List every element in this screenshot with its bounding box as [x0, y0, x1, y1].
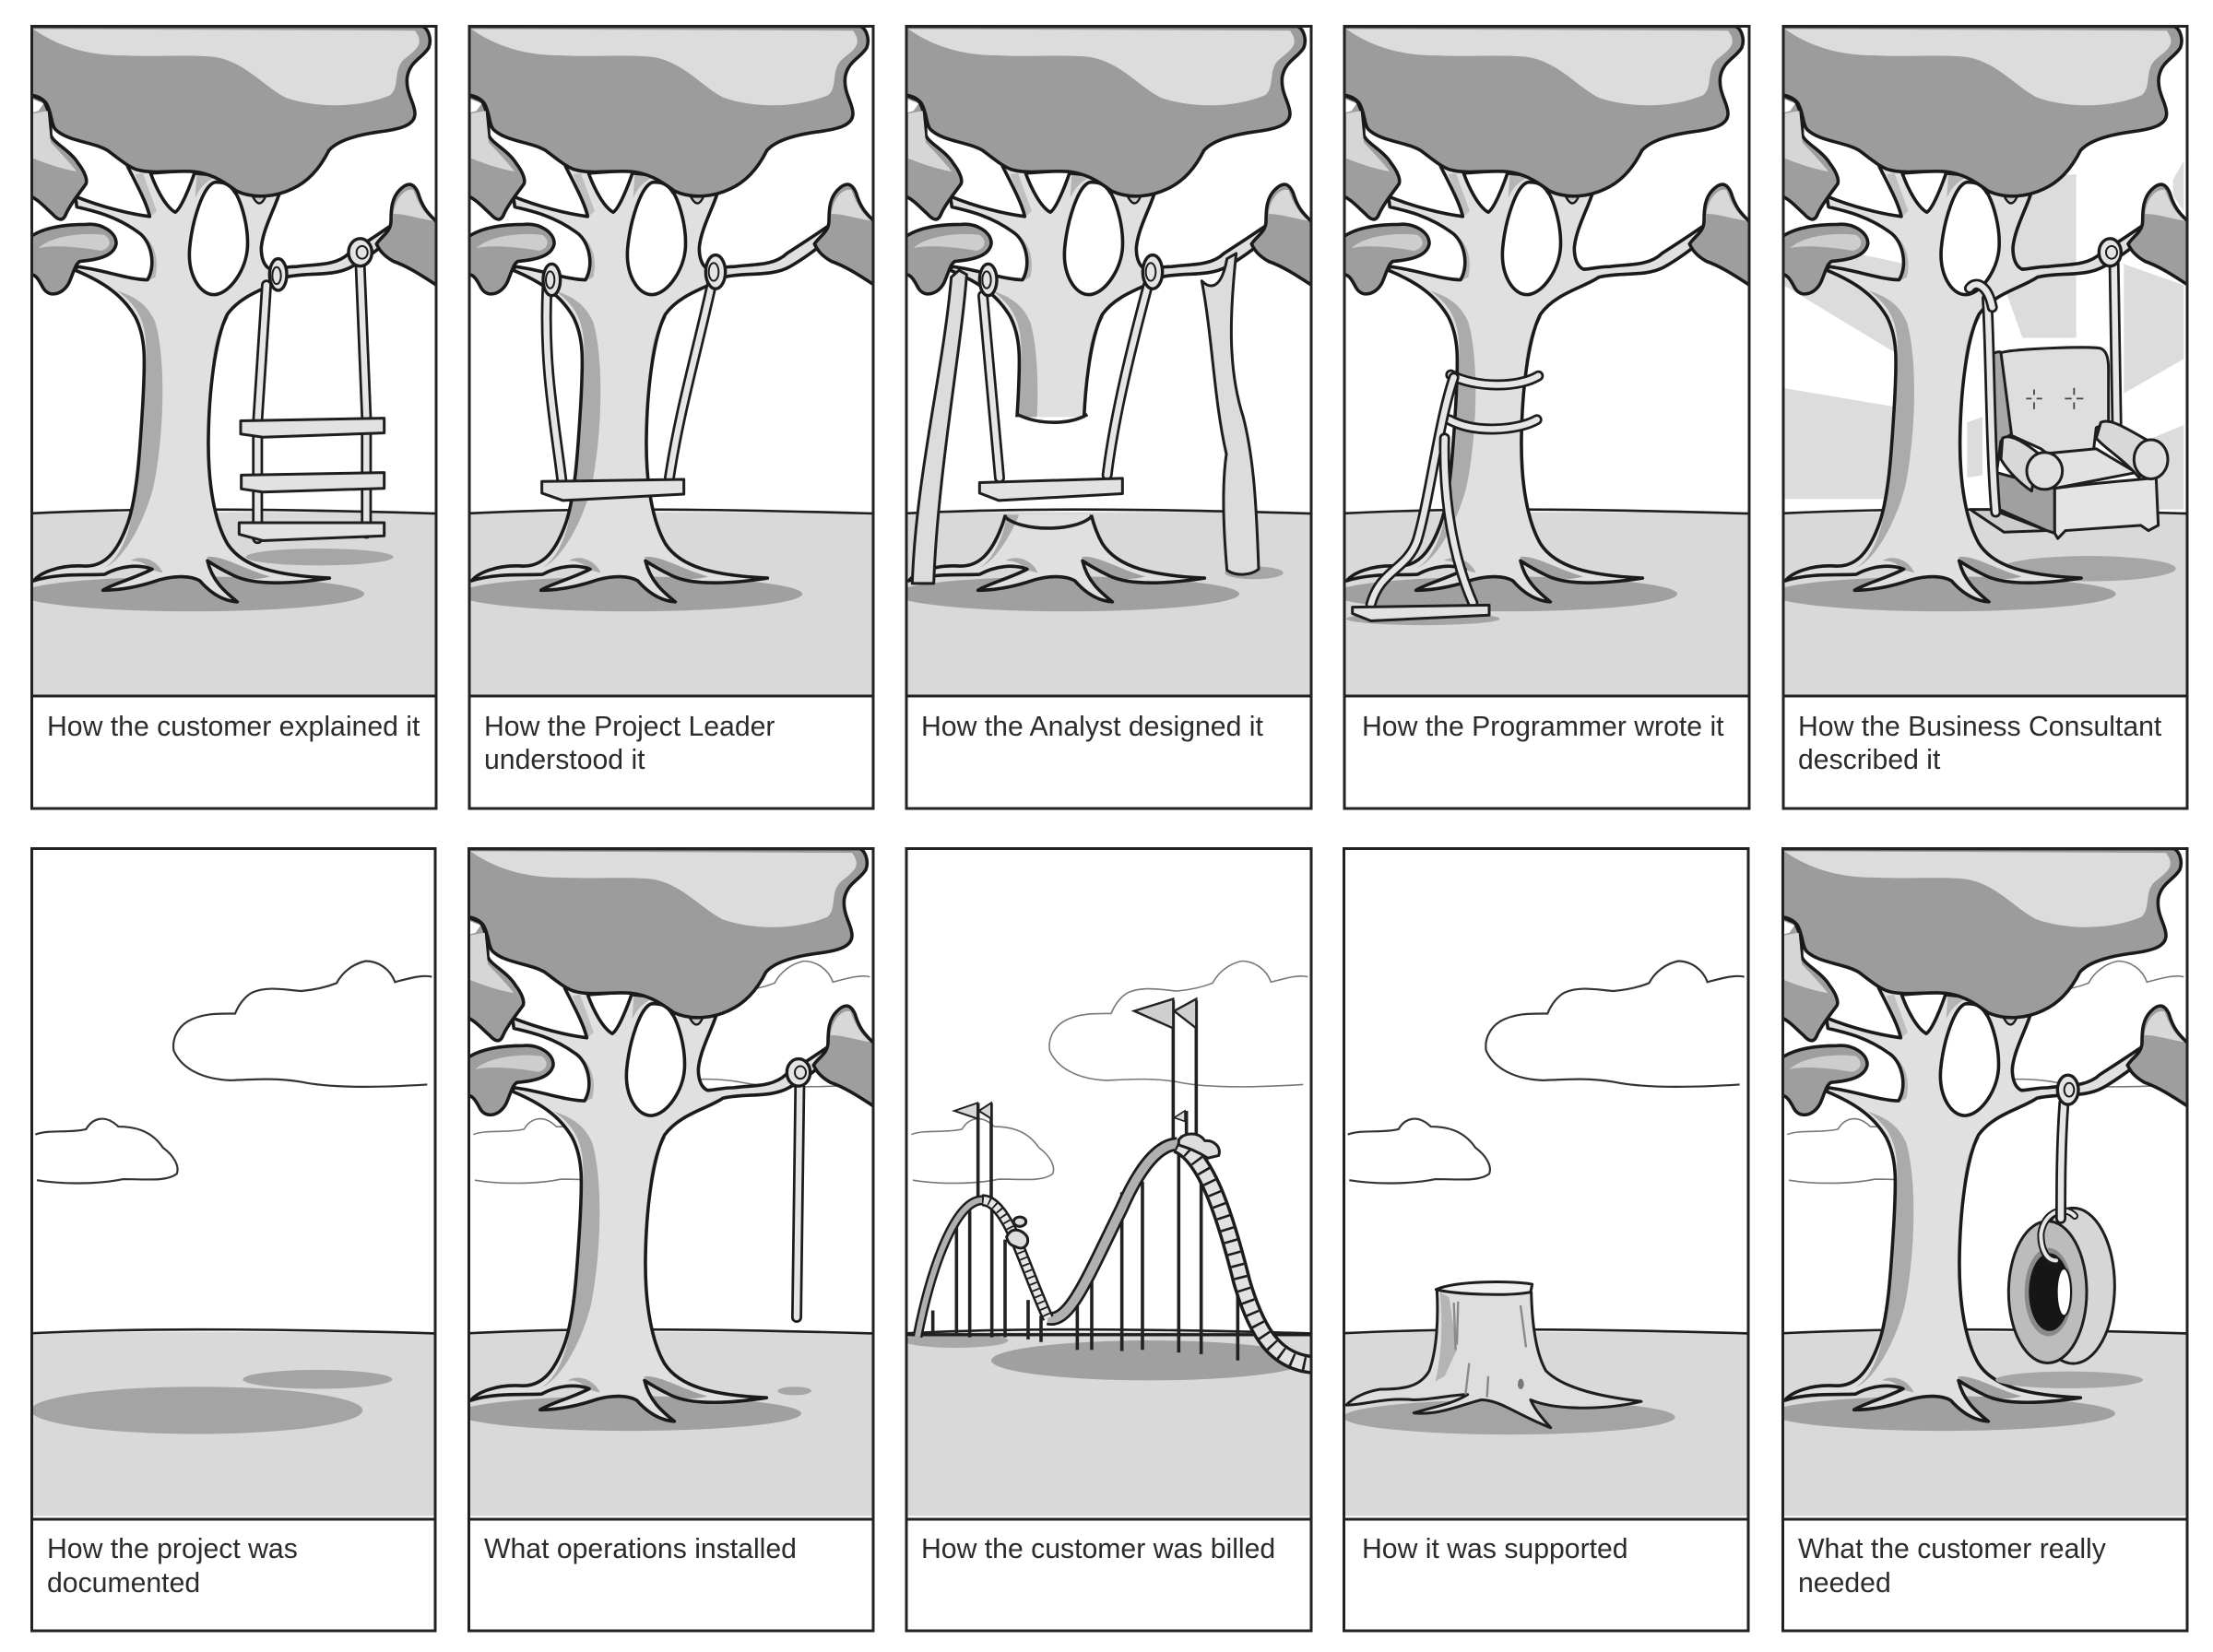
panel: how the business consultant described it	[1771, 26, 2195, 808]
illustration: tree with swing around trunk	[458, 27, 881, 697]
caption: How the Project Leader	[484, 712, 775, 742]
panel: how the programmer wrote it	[1333, 26, 1756, 808]
illustration: empty landscape with clouds and shadows	[25, 961, 443, 1516]
caption: How the customer was billed	[921, 1534, 1275, 1564]
illustration: rollercoaster with flags	[900, 961, 1318, 1516]
caption: How the Programmer wrote it	[1362, 712, 1724, 742]
illustration: tree with tire swing	[1771, 849, 2194, 1516]
caption: documented	[47, 1568, 200, 1599]
frame	[1783, 848, 2187, 1631]
frame	[906, 848, 1311, 1631]
caption: How the customer explained it	[47, 712, 420, 742]
panel: how the customer explained it	[20, 26, 443, 808]
panel: how the project leader understood it	[458, 26, 881, 808]
caption: described it	[1798, 745, 1941, 775]
panel: what operations installed	[457, 848, 880, 1631]
illustration: tree with armchair swing and sun rays	[1771, 27, 2195, 697]
illustration: tree with three-board swing	[20, 27, 443, 697]
frame	[906, 26, 1311, 808]
panel: what the customer really needed	[1771, 848, 2194, 1631]
caption: What operations installed	[484, 1534, 797, 1564]
caption: How the project was	[47, 1534, 298, 1564]
caption: How the Business Consultant	[1798, 712, 2161, 742]
caption: needed	[1798, 1568, 1891, 1599]
panel: how it was supported	[1336, 848, 1754, 1631]
frame	[1783, 26, 2187, 808]
frame	[1344, 848, 1748, 1631]
caption: How it was supported	[1362, 1534, 1628, 1564]
frame	[31, 26, 436, 808]
frame	[468, 848, 873, 1631]
frame	[469, 26, 873, 808]
frame	[31, 848, 435, 1631]
caption: understood it	[484, 745, 645, 775]
panel: how the analyst designed it	[895, 26, 1318, 808]
frame	[1344, 26, 1749, 808]
panel: how the customer was billed	[900, 848, 1318, 1631]
illustration: tree stump with clouds	[1336, 961, 1754, 1516]
illustration: tree with only a rope	[457, 849, 880, 1516]
caption: What the customer really	[1798, 1534, 2106, 1564]
panel: how the project was documented	[25, 848, 443, 1631]
illustration: cut trunk with propped swing	[895, 27, 1318, 697]
caption: How the Analyst designed it	[921, 712, 1263, 742]
illustration: tree with rope tied around trunk and board on the ground	[1333, 27, 1756, 697]
